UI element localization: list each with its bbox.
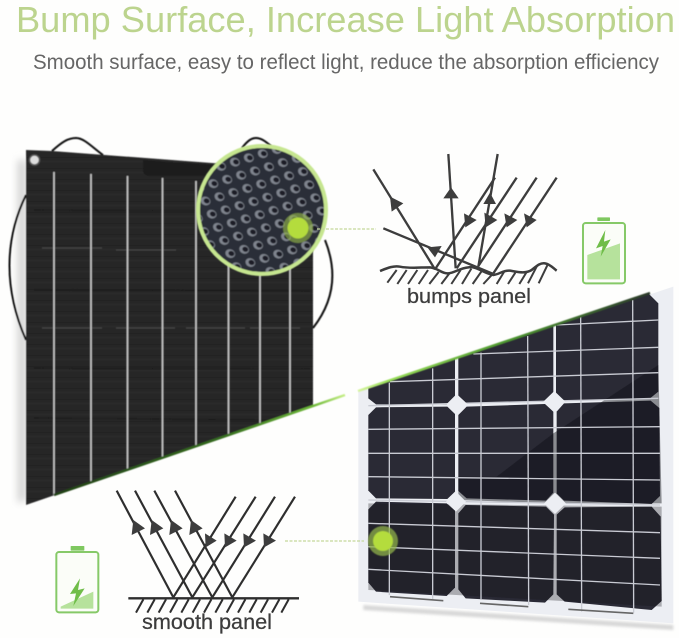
white frame (358, 287, 673, 623)
mounting hole (30, 155, 40, 165)
vertical bus lines (389, 300, 634, 613)
bumps panel diagram (373, 154, 557, 284)
green marker dot on glass panel (368, 526, 398, 556)
flat ground (128, 595, 299, 602)
panel: glass framed solar panel (358, 287, 673, 630)
corner diamonds (446, 391, 566, 514)
magnifier circle: bumpy surface (198, 146, 326, 274)
solar cells (368, 293, 662, 610)
arrowheads (132, 520, 276, 547)
panel texture bands (34, 210, 310, 420)
icon: battery low charge (56, 546, 98, 612)
panel: flexible black solar panel (10, 138, 345, 505)
connector tab (143, 160, 215, 176)
panel shadow (363, 605, 673, 630)
arrowheads (390, 187, 537, 257)
rays (117, 491, 295, 597)
dark reflection (458, 365, 662, 503)
green marker dot (283, 213, 313, 243)
smooth panel diagram (117, 491, 299, 613)
icon: battery high charge (583, 217, 625, 283)
green edge along diagonal (54, 395, 345, 495)
label: smooth panel: smooth panel (142, 611, 272, 634)
rays (373, 154, 557, 274)
hatches (136, 599, 289, 613)
title: Bump Surface, Increase Light Absorption (16, 0, 675, 40)
bottom bus bars (390, 597, 633, 613)
panel shadow (18, 160, 26, 503)
label: bumps panel: bumps panel (407, 286, 531, 308)
subtitle: Smooth surface, easy to reflect light, reduce the absorption efficiency (33, 51, 659, 74)
white vertical lines (54, 172, 290, 495)
dashed leader: bumps (317, 228, 376, 230)
green edge along glass panel (358, 293, 650, 391)
hatches (387, 265, 547, 284)
bumpy ground (380, 263, 557, 275)
cables (10, 138, 332, 340)
dashed leader: smooth (285, 540, 364, 542)
horizontal bus lines (368, 320, 660, 585)
panel body (26, 150, 313, 505)
